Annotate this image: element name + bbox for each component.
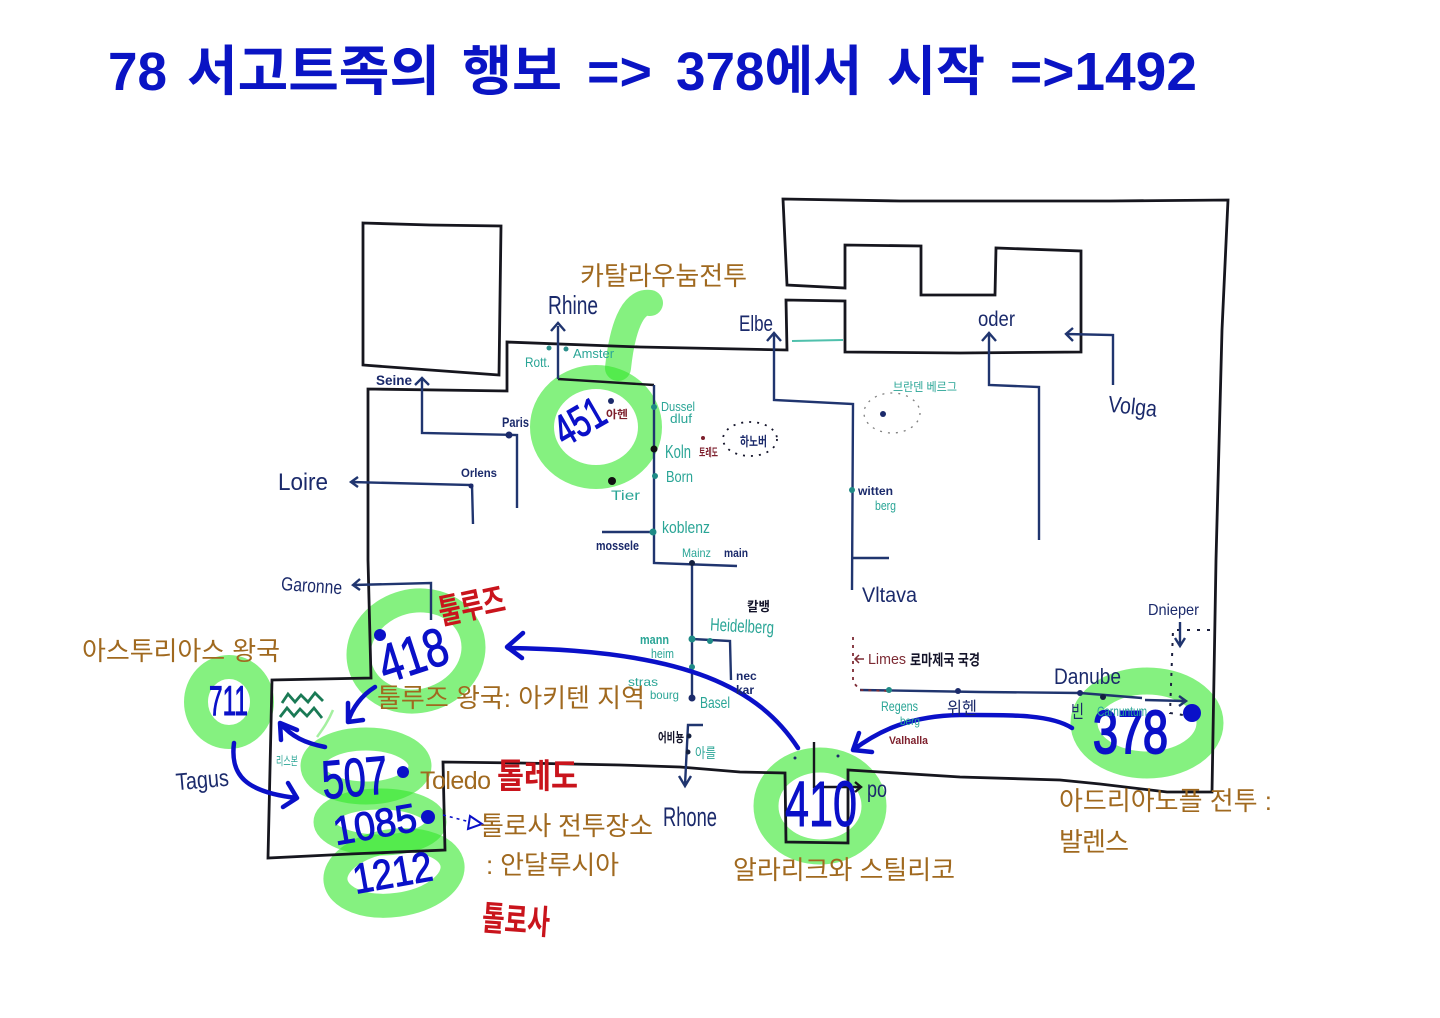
british isles box [363, 223, 501, 375]
teal city labels: berg [875, 498, 896, 513]
river: Loire [351, 477, 473, 524]
dark small labels [606, 407, 929, 747]
year 1085: 1085 [330, 796, 420, 854]
label: Andalusia: : 안달루시아 [486, 850, 619, 880]
label: Toledo in Korean: 톨레도 [497, 758, 578, 796]
river: Rhone [679, 725, 703, 786]
label: Valens: 발렌스 [1059, 827, 1129, 857]
label: Alaric and Stilicho: 알라리크와 스틸리코 [733, 855, 955, 885]
year 711: 711 [209, 677, 248, 724]
navy river labels: witten [857, 484, 893, 498]
river: Elbe and Vltava [767, 333, 889, 590]
label: Battle of Adrianople: 아드리아노플 전투 : [1059, 786, 1272, 816]
label: Toulouse: 툴루즈 [435, 581, 509, 632]
year 1212: 1212 [349, 842, 436, 903]
navy river labels: Elbe [739, 311, 773, 336]
city dots [468, 346, 1106, 760]
teal city labels: Basel [700, 695, 730, 712]
teal city labels: Born [666, 469, 693, 486]
year 418: 418 [371, 616, 456, 695]
navy river labels: Rhine [548, 290, 598, 320]
dashed ellipse: Hanover [723, 422, 777, 456]
label: Tolosa: 톨로사 [481, 900, 551, 942]
navy river labels: Danube [1054, 664, 1121, 689]
label: Toledo: Toledo [420, 767, 491, 795]
title: =>1492 [1010, 42, 1197, 102]
title: 시작 [887, 42, 985, 102]
dark small labels: Valhalla [889, 735, 929, 747]
green highlight rings [196, 303, 1210, 913]
limes border [853, 637, 889, 691]
teal city labels: koblenz [662, 518, 710, 537]
teal city labels: Mainz [682, 546, 711, 560]
teal city labels: berg [900, 714, 920, 728]
teal city labels: mann [640, 632, 669, 647]
ring: 410 Alaric [766, 760, 874, 852]
brown event labels [82, 261, 1272, 885]
teal city labels: stras [628, 675, 658, 689]
river: Po [814, 742, 861, 792]
navy river labels: 위헨 [947, 699, 977, 718]
title: 서고트족의 [187, 42, 440, 102]
navy river labels: Loire [278, 469, 328, 496]
river: Danube [860, 690, 1186, 706]
map outline: coastlines [268, 199, 1228, 858]
ring: 451 Catalaunum [542, 303, 650, 477]
river: Garonne [353, 579, 431, 620]
migration arrows [233, 633, 1072, 829]
event dots [374, 629, 1201, 824]
label: Kingdom of Asturias: 아스투리아스 왕국 [82, 636, 280, 666]
teal city labels: 브란덴 베르그 [893, 380, 957, 394]
navy river labels: Rhone [663, 802, 717, 832]
Limes label: 로마제국 국경 [910, 652, 980, 669]
teal city labels: heim [651, 646, 674, 661]
navy river labels: Seine [376, 372, 412, 388]
year 378: 378 [1093, 699, 1168, 766]
teal city labels: dluf [670, 411, 692, 426]
arrow: 711 to 507 [233, 743, 297, 807]
ring: 1212 Tolosa [331, 833, 457, 913]
ring: 711 Asturias [196, 667, 262, 737]
arrow: 378 to 410 [853, 715, 1072, 752]
teal city labels: Tier [611, 487, 640, 503]
title: 행보 [462, 42, 562, 102]
teal city labels: Carnuntum [1097, 703, 1147, 719]
Limes label [855, 651, 980, 669]
year 507: 507 [319, 745, 390, 811]
baltic teal line [792, 340, 843, 341]
navy river labels: Orlens [461, 466, 497, 480]
navy river labels: main [724, 546, 748, 560]
teal city labels: 리스본 [276, 754, 298, 768]
navy river labels: oder [978, 308, 1015, 331]
label: Kingdom of Toulouse: 툴루즈 왕국: 아키텐 지역 [377, 683, 645, 713]
teal city labels: Koln [665, 442, 691, 462]
navy river labels: Dnieper [1148, 602, 1200, 619]
teal city labels: Dussel [661, 399, 695, 414]
navy river labels: 하노버 [740, 434, 767, 449]
ring: 418 Toulouse [347, 588, 485, 714]
pale streak near Lisbon [317, 710, 333, 737]
red place names [435, 581, 578, 942]
river: Volga [1066, 328, 1113, 385]
river: Oder [982, 333, 1039, 540]
dashed ellipse: Brandenburg [864, 393, 920, 433]
teal city labels: 아를 [695, 745, 716, 761]
dark small labels: 토레도 [699, 445, 718, 459]
teal city labels: Rott. [525, 354, 550, 370]
navy river labels: Paris [502, 414, 529, 430]
label: Tolosa battlefield: 톨로사 전투장소 [480, 811, 653, 841]
label: Catalaunum battle: 카탈라우눔전투 [580, 261, 747, 291]
arrow: 1085 to Tolosa battlefield [443, 815, 482, 829]
navy river labels: Tagus [175, 765, 230, 796]
navy river labels: Volga [1107, 391, 1159, 422]
baltic and north coast [268, 199, 1228, 858]
ring: 1085 [324, 799, 436, 845]
navy river labels: Garonne [280, 574, 343, 599]
title: 78 [108, 42, 167, 102]
navy river labels [175, 290, 1200, 832]
rivers [351, 323, 1210, 792]
teal city labels [276, 346, 1147, 768]
ring: 507 Toledo [312, 739, 420, 793]
icon: sea waves [280, 693, 323, 718]
year numbers [209, 388, 1168, 903]
navy river labels: mossele [596, 538, 639, 553]
arrow: 410 to 418 [507, 633, 798, 748]
dark small labels: 아헨 [606, 407, 628, 421]
Limes label: Limes [868, 651, 906, 668]
title: 378에서 [676, 42, 862, 102]
title [108, 42, 1197, 102]
river: Dnieper [1170, 622, 1210, 715]
year 451: 451 [545, 388, 615, 456]
teal city labels: Regens [881, 698, 918, 714]
navy river labels: 빈 [1071, 702, 1084, 722]
arrow: 418 to 507 [348, 687, 375, 722]
teal city labels: Heidelberg [710, 614, 775, 638]
year 410: 410 [785, 768, 857, 840]
teal city labels: bourg [650, 688, 679, 702]
dark small labels: 어비뇽 [658, 730, 684, 745]
title: => [587, 42, 652, 102]
arrow: 507 to Lisbon [280, 723, 325, 747]
ring: 378 Adrianople [1084, 681, 1210, 765]
teal city labels: Amster [573, 346, 615, 361]
river: Seine [415, 378, 517, 508]
navy river labels: Vltava [862, 584, 917, 607]
navy river labels: kar [736, 683, 754, 697]
dark small labels: 칼뱅 [747, 599, 770, 614]
navy river labels: nec [736, 669, 757, 683]
navy river labels: po [867, 776, 887, 802]
river: Rhine [551, 323, 737, 698]
